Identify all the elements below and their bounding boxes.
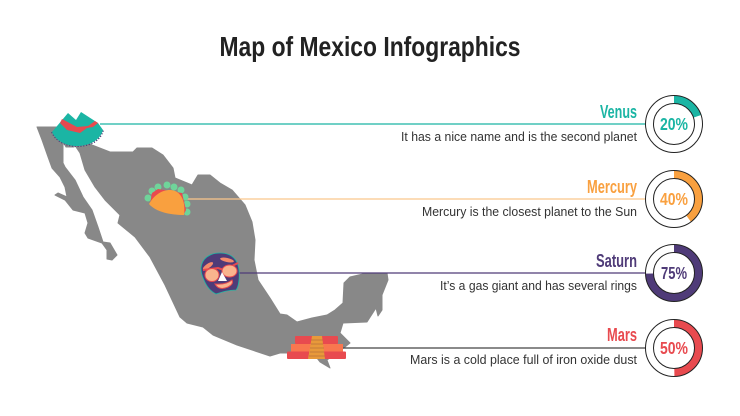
icon: taco <box>144 182 190 216</box>
donut: Saturn 75%: 75% <box>661 263 687 283</box>
icon: wrestling mask <box>201 253 239 294</box>
donut: Mars 50% <box>646 320 702 376</box>
icon: sombrero <box>52 112 103 146</box>
item: Venus: Venus <box>600 102 637 122</box>
icon: pyramid <box>287 336 346 359</box>
item: Mercury: Mercury <box>587 177 637 197</box>
donut: Mercury 40%: 40% <box>660 189 688 209</box>
item: Saturn: It’s a gas giant and has several rings <box>440 278 637 293</box>
donut: Venus 20% <box>646 96 702 152</box>
donut: Venus 20%: 20% <box>660 114 688 134</box>
donut: Mercury 40% <box>646 170 702 228</box>
donut: Mars 50%: 50% <box>660 338 688 358</box>
item: Mars <box>410 320 702 376</box>
item: Mars: Mars is a cold place full of iron oxide dust <box>410 352 637 367</box>
title: Map of Mexico Infographics <box>220 31 520 62</box>
map of Mexico <box>37 127 388 368</box>
item: Venus <box>401 96 702 152</box>
item: Mercury: Mercury is the closest planet to the Sun <box>422 204 637 219</box>
connector lines <box>100 124 646 348</box>
item: Mars: Mars <box>607 325 637 345</box>
item: Saturn: Saturn <box>596 251 637 271</box>
donut: Saturn 75% <box>646 244 702 302</box>
item: Mercury <box>422 170 702 228</box>
item: Saturn <box>440 244 702 302</box>
item: Venus: It has a nice name and is the second planet <box>401 129 637 144</box>
